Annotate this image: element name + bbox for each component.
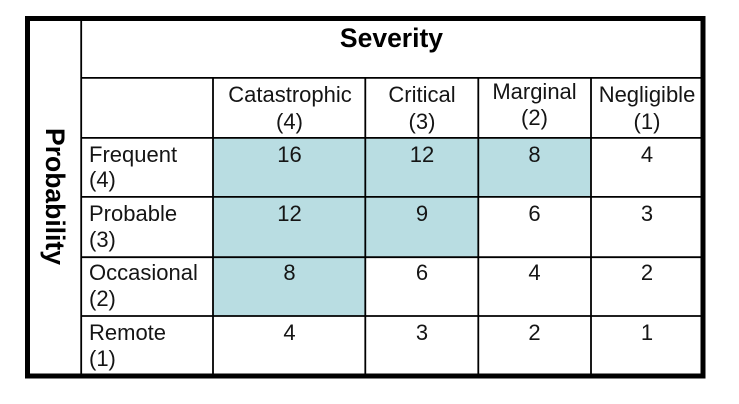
row header: Remote: Remote bbox=[89, 320, 166, 345]
column headers bbox=[228, 79, 695, 134]
row values: Probable: 6 bbox=[528, 201, 541, 226]
row values: Probable bbox=[277, 201, 653, 226]
row values: Occasional: 2 bbox=[641, 260, 653, 285]
row values: Probable: 12 bbox=[277, 201, 302, 226]
row header: Occasional: (2) bbox=[89, 286, 116, 311]
table grid lines bbox=[81, 18, 703, 376]
row values: Frequent: 16 bbox=[277, 142, 302, 167]
row values: Remote: 2 bbox=[528, 320, 541, 345]
row values: Remote: 1 bbox=[641, 320, 653, 345]
column header: Marginal: Marginal bbox=[492, 79, 577, 104]
row header: Probable: (3) bbox=[89, 227, 116, 252]
column header: Critical: Critical bbox=[388, 82, 456, 107]
row values: Frequent: 12 bbox=[410, 142, 434, 167]
row header: Probable: Probable bbox=[89, 201, 177, 226]
row values: Occasional: 8 bbox=[283, 260, 296, 285]
row values: Remote bbox=[283, 320, 653, 345]
row values: Probable: 9 bbox=[416, 201, 428, 226]
column header: Negligible: (1) bbox=[634, 109, 660, 134]
column header: Critical: (3) bbox=[409, 109, 435, 134]
heading: Probability: Probability bbox=[40, 128, 70, 265]
row values: Frequent: 4 bbox=[641, 142, 653, 167]
row values: Frequent bbox=[277, 142, 653, 167]
row values: Frequent: 8 bbox=[528, 142, 541, 167]
row header: Occasional: Occasional bbox=[89, 260, 198, 285]
column header: Negligible: Negligible bbox=[599, 82, 695, 107]
column header: Marginal: (2) bbox=[521, 105, 548, 130]
row values: Occasional: 6 bbox=[416, 260, 428, 285]
row values: Occasional bbox=[283, 260, 653, 285]
row headers bbox=[89, 142, 198, 371]
row header: Frequent: (4) bbox=[89, 167, 116, 192]
row values: Remote: 4 bbox=[283, 320, 296, 345]
row values: Remote: 3 bbox=[416, 320, 428, 345]
row header: Remote: (1) bbox=[89, 346, 116, 371]
row values: Occasional: 4 bbox=[528, 260, 541, 285]
heading: Severity: Severity bbox=[340, 23, 443, 53]
column header: Catastrophic: (4) bbox=[276, 109, 303, 134]
row values: Probable: 3 bbox=[641, 201, 653, 226]
highlighted high-risk cells bbox=[213, 138, 591, 316]
row header: Frequent: Frequent bbox=[89, 142, 177, 167]
column header: Catastrophic: Catastrophic bbox=[228, 82, 352, 107]
